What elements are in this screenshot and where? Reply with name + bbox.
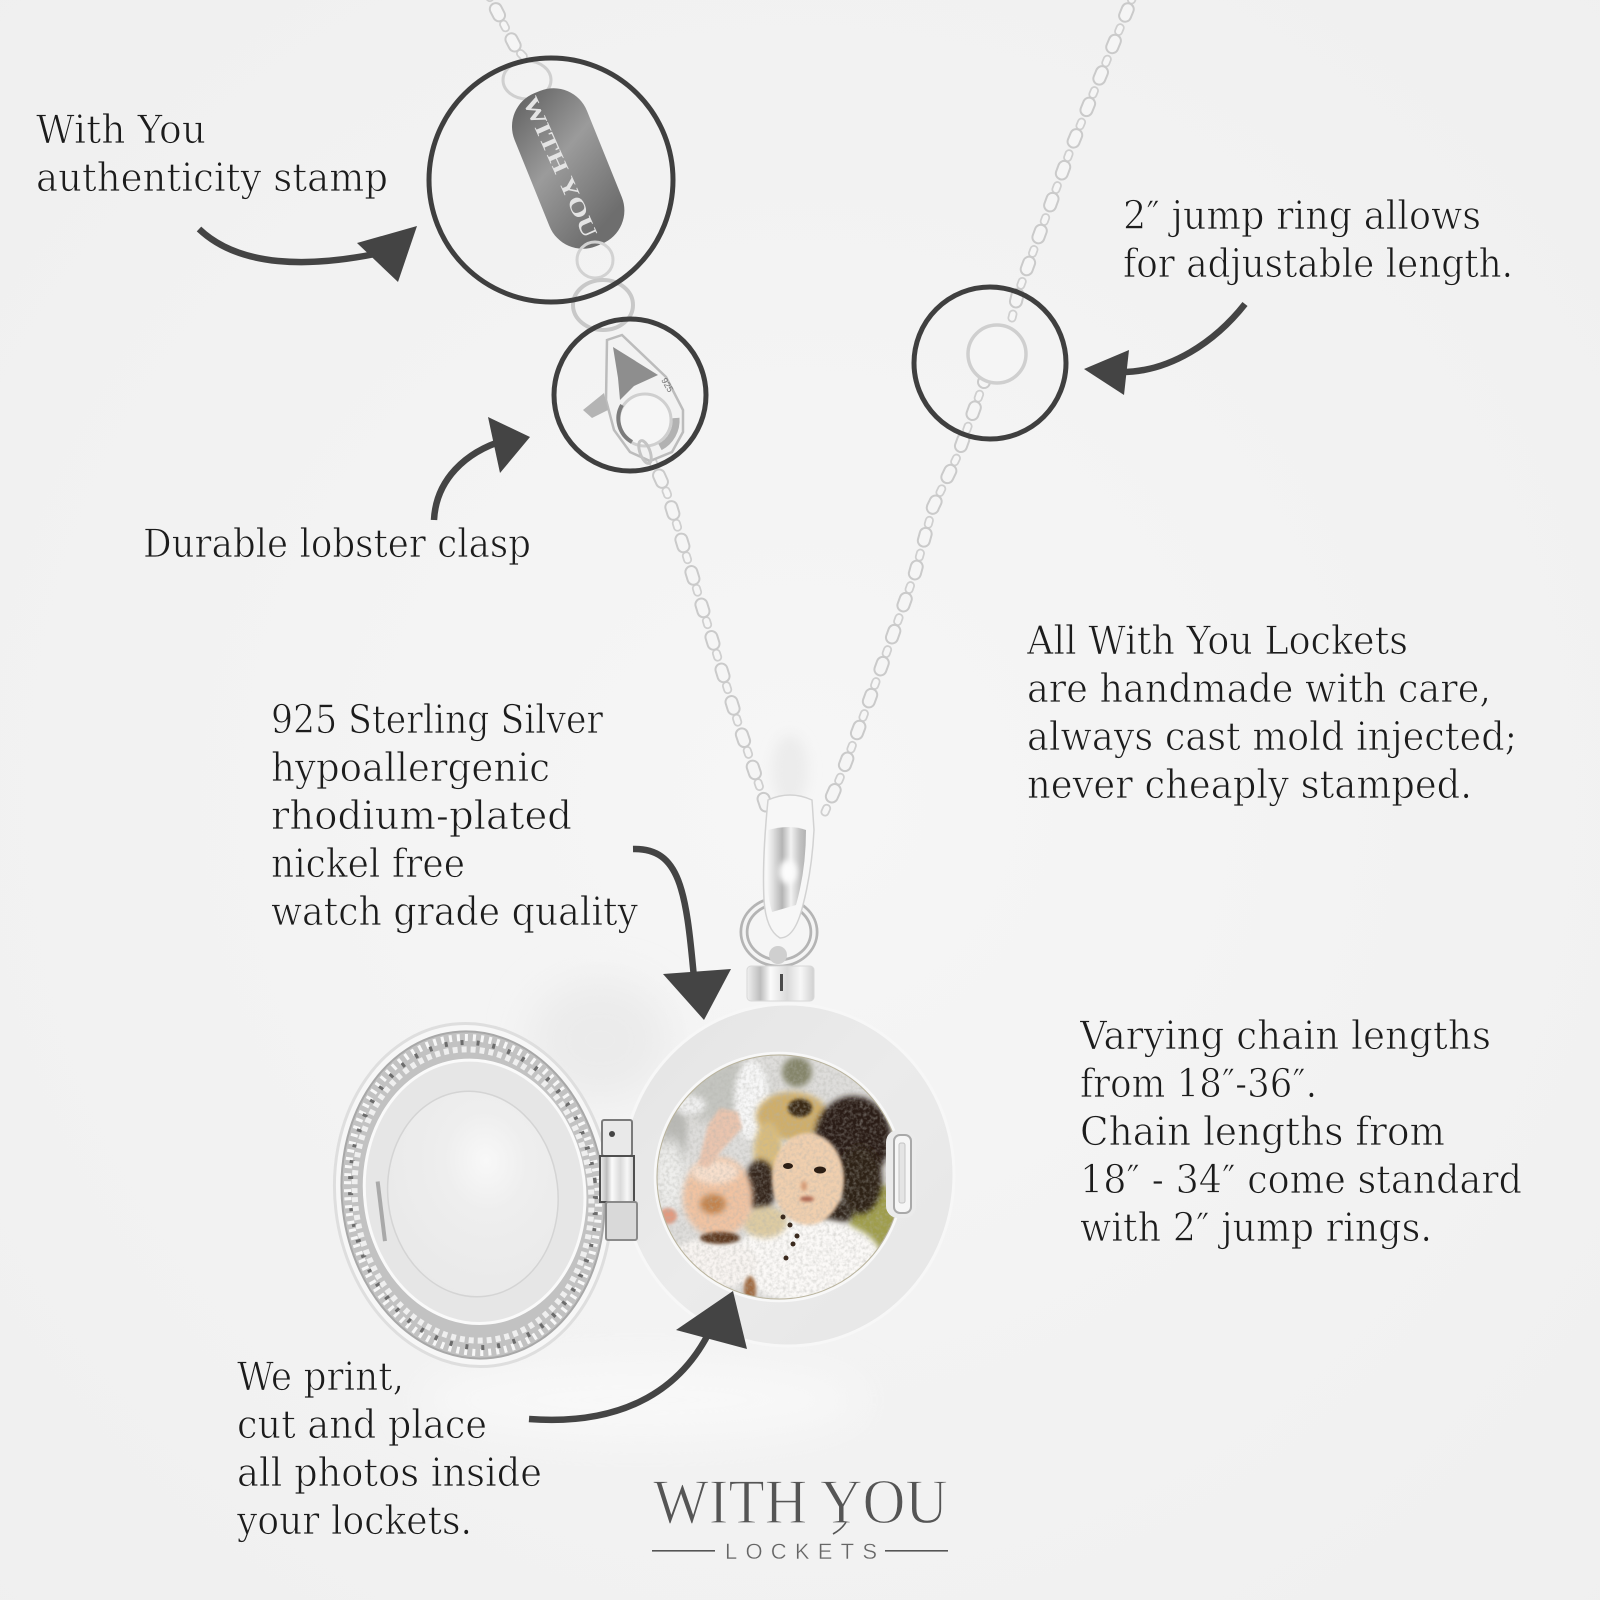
- necklace chain: [488, 0, 1134, 812]
- soft shadows around the locket: [420, 735, 860, 1440]
- text: photos: [236, 1355, 542, 1544]
- text: materials: rhodium-plated: [271, 794, 572, 839]
- text: handmade: All With You Lockets: [1026, 619, 1408, 664]
- text: jump ring: for adjustable length.: [1123, 242, 1513, 287]
- photo rim: [655, 1053, 903, 1301]
- callout circle: authenticity stamp: [429, 58, 673, 302]
- text: lobster clasp: Durable lobster clasp: [143, 522, 531, 567]
- text: handmade: [1026, 619, 1517, 808]
- authenticity stamp tag: [501, 77, 635, 260]
- arrow: authenticity stamp: [199, 226, 417, 282]
- text: authenticity stamp: authenticity stamp: [36, 156, 388, 201]
- authenticity stamp tag: WITH YOU: [518, 92, 603, 242]
- text: materials: hypoallergenic: [271, 746, 550, 791]
- arrow: jump ring: [1084, 304, 1245, 395]
- locket body disc: [622, 1004, 954, 1346]
- inner flat ring: [349, 1047, 600, 1336]
- text: chain lengths: Chain lengths from: [1080, 1110, 1445, 1155]
- text: jump ring: 2″ jump ring allows: [1123, 194, 1481, 239]
- top jump ring: [503, 61, 551, 99]
- arrow: photo: [529, 1291, 747, 1420]
- text: chain lengths: Varying chain lengths: [1079, 1014, 1491, 1059]
- logo: With You Lockets: LOCKETS: [725, 1539, 877, 1564]
- lobster clasp: [583, 335, 683, 465]
- text: photos: your lockets.: [236, 1499, 472, 1544]
- latch notch: [886, 1130, 916, 1218]
- text: photos: all photos inside: [237, 1451, 542, 1496]
- text: chain lengths: with 2″ jump rings.: [1080, 1206, 1432, 1251]
- text: authenticity stamp: With You: [36, 108, 206, 153]
- pendant bail: [764, 795, 814, 938]
- callout circle: jump ring: [914, 287, 1066, 439]
- adjustable jump ring: [968, 325, 1026, 383]
- hinge: [600, 1120, 637, 1240]
- text: photos: We print,: [237, 1355, 404, 1400]
- text: jump ring: [1123, 194, 1513, 287]
- text: handmade: always cast mold injected;: [1027, 715, 1517, 760]
- clasp hardware: tag, rings and lobster clasp: [501, 61, 683, 465]
- print grain: [655, 1053, 903, 1301]
- text: authenticity stamp: [36, 108, 388, 201]
- bail knob: [769, 946, 787, 964]
- text: materials: [271, 698, 638, 935]
- large ring: [573, 280, 633, 330]
- opened lid: [315, 1007, 631, 1383]
- beaded band: [323, 1016, 623, 1374]
- logo: With You Lockets: [652, 1466, 948, 1564]
- collar: [747, 966, 814, 1001]
- text: materials: nickel free: [271, 842, 465, 887]
- text: handmade: are handmade with care,: [1027, 667, 1491, 712]
- text: chain lengths: 18″ - 34″ come standard: [1080, 1158, 1522, 1203]
- lobster clasp: 925: [659, 376, 675, 394]
- text: photos: cut and place: [237, 1403, 487, 1448]
- text: chain lengths: from 18″-36″.: [1080, 1062, 1317, 1107]
- bail ring: [744, 901, 814, 963]
- glass dome: [376, 1081, 570, 1307]
- text: chain lengths: [1079, 1014, 1522, 1251]
- locket pendant: [315, 795, 954, 1383]
- engraved mark: [376, 1181, 387, 1241]
- callout circle: lobster clasp: [554, 319, 706, 471]
- lower small ring: [577, 242, 613, 278]
- arrow: lobster clasp: [434, 417, 530, 520]
- text: materials: 925 Sterling Silver: [271, 698, 603, 743]
- text: materials: watch grade quality: [271, 890, 638, 935]
- logo: With You Lockets: WITH YOU: [653, 1466, 948, 1537]
- arrow: sterling silver: [633, 849, 731, 1020]
- text: handmade: never cheaply stamped.: [1027, 763, 1472, 808]
- photo of two children: [654, 1053, 905, 1304]
